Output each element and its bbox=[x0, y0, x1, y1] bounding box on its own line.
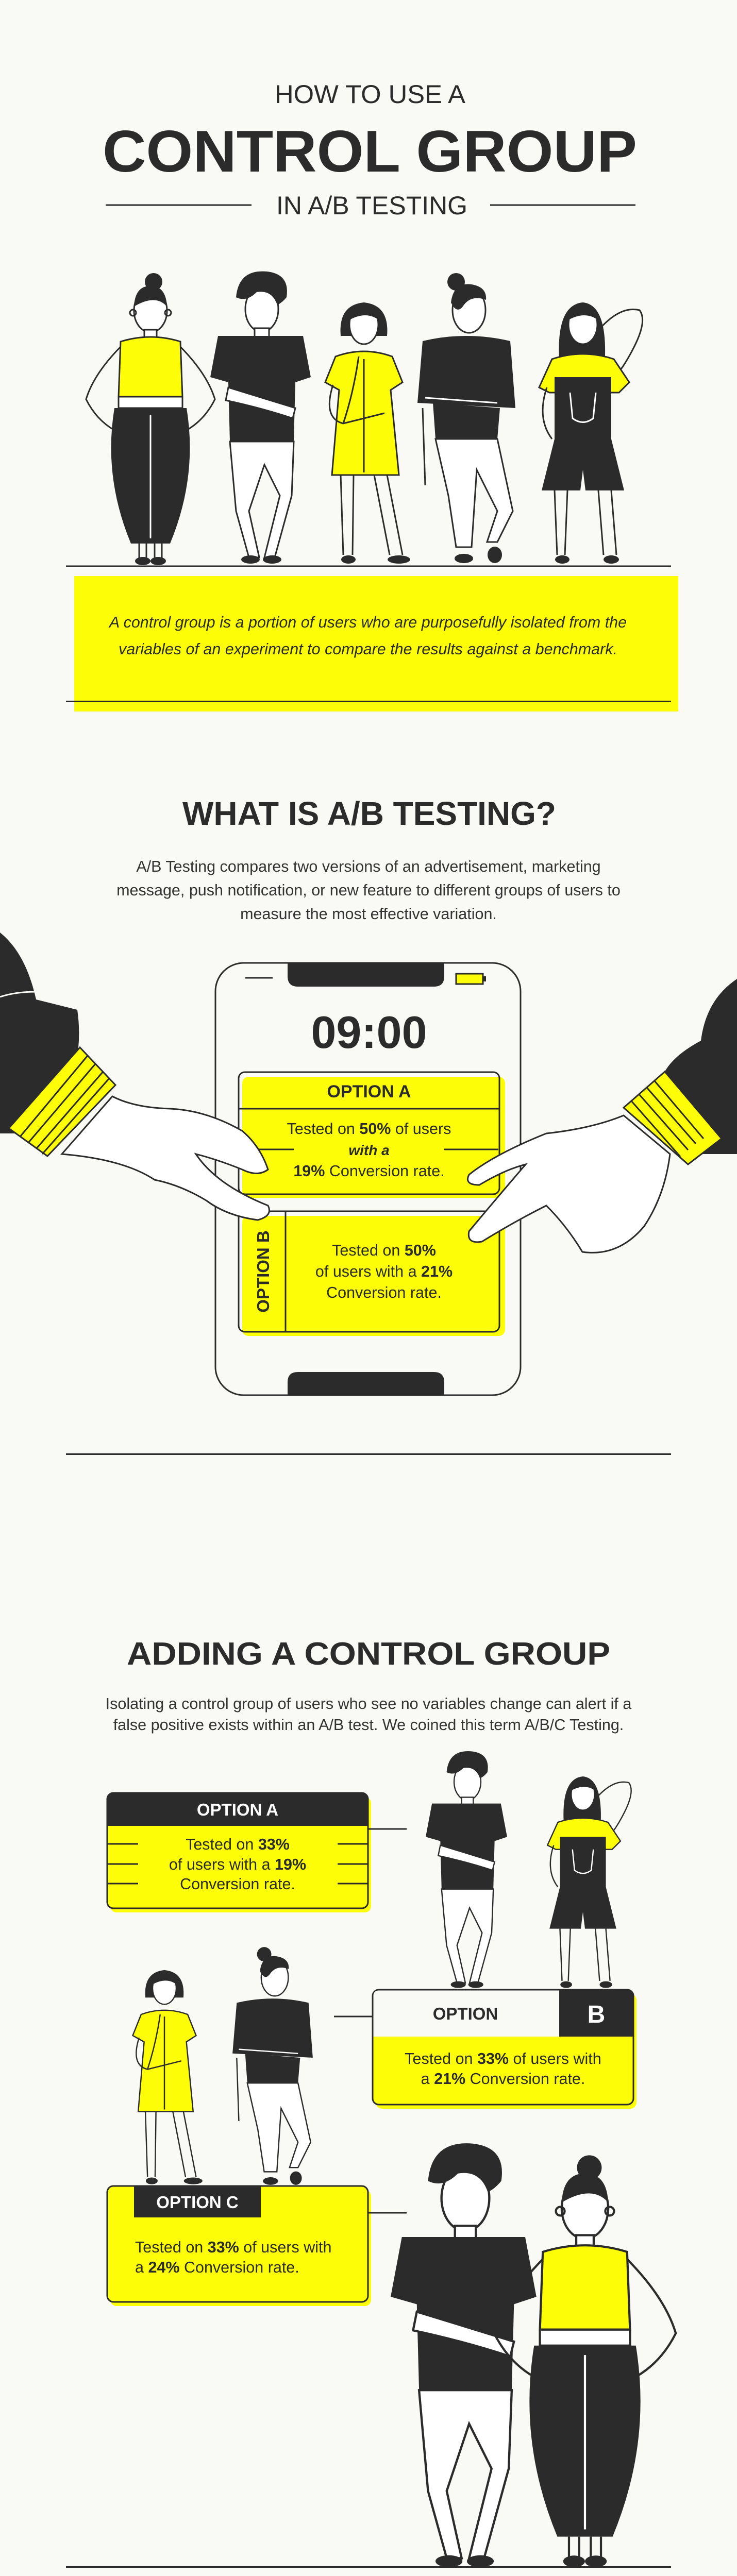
option B card: OPTION bbox=[433, 2004, 498, 2023]
clock: 09:00 bbox=[311, 1007, 427, 1058]
option B card: OPTION B bbox=[254, 1230, 273, 1313]
title bbox=[103, 80, 637, 220]
option C card: a 24% Conversion rate. bbox=[135, 2259, 299, 2276]
option A card: Tested on 33% bbox=[186, 1836, 290, 1853]
option A card: 19% Conversion rate. bbox=[293, 1162, 445, 1180]
option A card: of users with a 19% bbox=[169, 1856, 306, 1873]
text: control group description bbox=[106, 1695, 632, 1734]
option A card: with a bbox=[348, 1142, 390, 1158]
text: control group description: Isolating a control group of users who see no variables change can alert if a bbox=[106, 1695, 631, 1713]
option C card: OPTION C bbox=[156, 2193, 239, 2212]
heading: adding a control group: ADDING A CONTROL GROUP bbox=[127, 1636, 610, 1672]
title: CONTROL GROUP bbox=[103, 119, 637, 184]
option A card: OPTION A bbox=[327, 1082, 411, 1101]
callout: definition: A control group is a portion of users who are purposefully isolated from the bbox=[109, 614, 627, 631]
callout: definition bbox=[74, 576, 678, 711]
title: HOW TO USE A bbox=[275, 80, 466, 109]
text: a/b testing description: message, push notification, or new feature to different groups of users to bbox=[116, 882, 621, 899]
illustration: five people bbox=[66, 271, 671, 567]
option B card: a 21% Conversion rate. bbox=[421, 2070, 585, 2088]
option A card: OPTION A bbox=[197, 1800, 278, 1819]
people pair 3 bbox=[391, 2143, 676, 2567]
option A card: Conversion rate. bbox=[180, 1875, 295, 1893]
illustration: right hand bbox=[467, 979, 737, 1253]
title: IN A/B TESTING bbox=[276, 191, 467, 220]
option B card bbox=[334, 1990, 636, 2109]
people pair 2 bbox=[133, 1947, 313, 2185]
option B card: of users with a 21% bbox=[315, 1263, 453, 1280]
callout: definition: variables of an experiment to compare the results against a benchmark. bbox=[119, 640, 617, 658]
option A card bbox=[107, 1793, 407, 1912]
text: a/b testing description bbox=[116, 858, 621, 923]
option B card: Tested on 50% bbox=[332, 1242, 436, 1259]
option B card: Conversion rate. bbox=[326, 1284, 442, 1301]
text: a/b testing description: A/B Testing compares two versions of an advertisement, marketing bbox=[136, 858, 601, 875]
people pair 1 bbox=[426, 1751, 631, 1988]
text: control group description: false positive exists within an A/B test. We coined this term A/B/C Testing. bbox=[113, 1716, 624, 1734]
option B card: Tested on 33% of users with bbox=[405, 2050, 601, 2067]
option A card: Tested on 50% of users bbox=[287, 1120, 451, 1138]
text: a/b testing description: measure the most effective variation. bbox=[240, 905, 497, 923]
option C card: Tested on 33% of users with bbox=[135, 2239, 331, 2256]
option C card bbox=[107, 2186, 407, 2306]
heading: what is a/b testing: WHAT IS A/B TESTING? bbox=[182, 795, 556, 832]
option B card bbox=[239, 1211, 505, 1336]
illustration: left hand bbox=[0, 933, 270, 1221]
option A card bbox=[239, 1072, 505, 1198]
illustration: phone with options bbox=[214, 962, 522, 1396]
option B card: B bbox=[588, 2001, 605, 2028]
